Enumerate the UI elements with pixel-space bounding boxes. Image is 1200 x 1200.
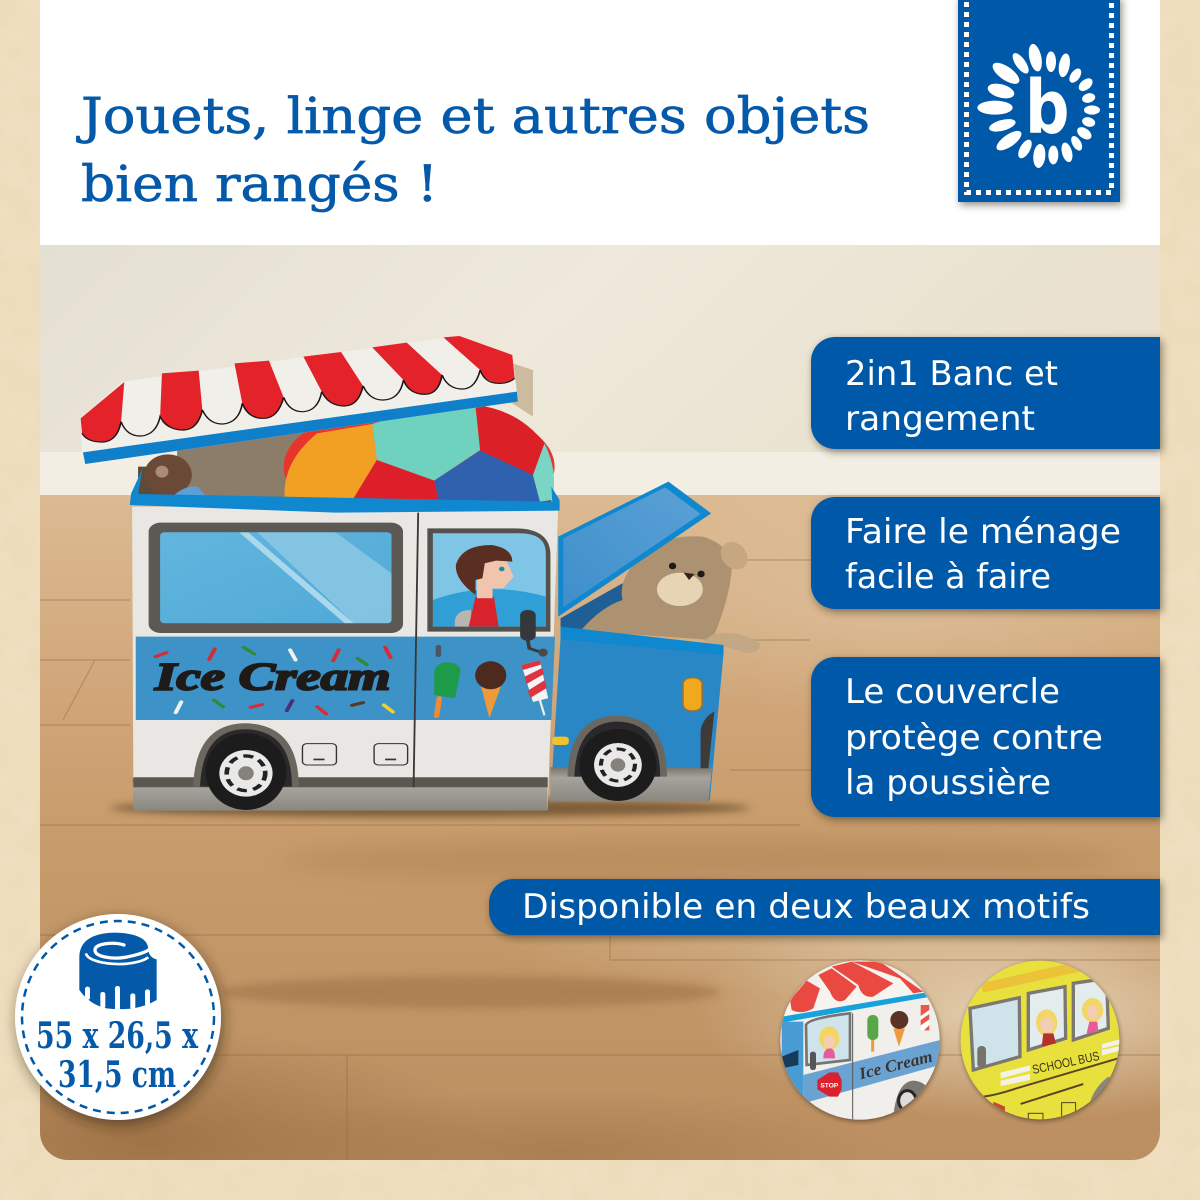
main box body	[132, 507, 558, 811]
cab window with boy	[427, 528, 550, 632]
feature bar: 2in1	[811, 337, 1160, 449]
feature bar: motifs: Disponible en deux beaux motifs	[522, 887, 1090, 927]
shadow under storage box	[110, 799, 750, 817]
dimensions text: 55 x 26,5 x	[36, 1015, 198, 1057]
door handle slot	[436, 645, 441, 657]
title: Jouets, linge et autres objets	[76, 87, 870, 145]
photo: room with wooden floor	[40, 245, 1160, 1160]
rear wheel	[193, 723, 299, 810]
motif thumbnail: ice cream: Ice Cream	[856, 1047, 934, 1083]
dimensions text: 31,5 cm	[58, 1054, 176, 1096]
title	[76, 87, 870, 213]
feature bar: ménage: facile à faire	[845, 557, 1051, 597]
header panel	[40, 0, 1160, 246]
large window	[150, 524, 402, 632]
front box lid	[558, 482, 711, 617]
icon: striped ice lolly	[521, 660, 548, 715]
side mirror	[520, 610, 548, 657]
logo tag	[958, 0, 1120, 202]
box rim	[130, 468, 560, 513]
logo tag: b	[1025, 66, 1069, 151]
feature bar: couvercle: Le couvercle	[845, 672, 1060, 712]
lettering: Ice Cream: Ice Cream	[154, 655, 391, 698]
feature bar: couvercle: la poussière	[845, 763, 1051, 803]
dimensions badge	[15, 914, 221, 1120]
feature bar: 2in1: rangement	[845, 399, 1035, 439]
contents inside main box	[138, 363, 551, 503]
sprinkles	[156, 647, 393, 714]
feature bar: couvercle: protège contre	[845, 718, 1103, 758]
teddy bear	[581, 536, 760, 653]
motif thumbnail: school bus: SCHOOL BUS	[1031, 1049, 1101, 1077]
awning lid	[81, 336, 518, 464]
title: bien rangés !	[81, 155, 438, 213]
front wheel	[567, 716, 667, 801]
storage flaps	[302, 744, 408, 765]
feature bar: ménage	[811, 497, 1160, 609]
icon: ice cream cone	[475, 661, 506, 718]
feature bar: motifs	[489, 879, 1160, 935]
feature bar: 2in1: 2in1 Banc et	[845, 354, 1058, 394]
icon: green popsicle	[434, 662, 460, 716]
product: ice cream van storage box	[81, 336, 760, 811]
feature bar: ménage: Faire le ménage	[845, 512, 1121, 552]
motif thumbnail: ice cream: STOP	[820, 1082, 839, 1089]
front box body	[550, 627, 724, 802]
motif thumbnail: ice cream	[777, 957, 943, 1123]
plush ball	[284, 406, 555, 502]
motif thumbnail: school bus	[957, 957, 1123, 1127]
icon: measuring tape	[79, 933, 157, 1011]
feature bar: couvercle	[811, 657, 1160, 817]
dimensions text	[36, 1015, 198, 1096]
front box interior	[561, 583, 629, 640]
